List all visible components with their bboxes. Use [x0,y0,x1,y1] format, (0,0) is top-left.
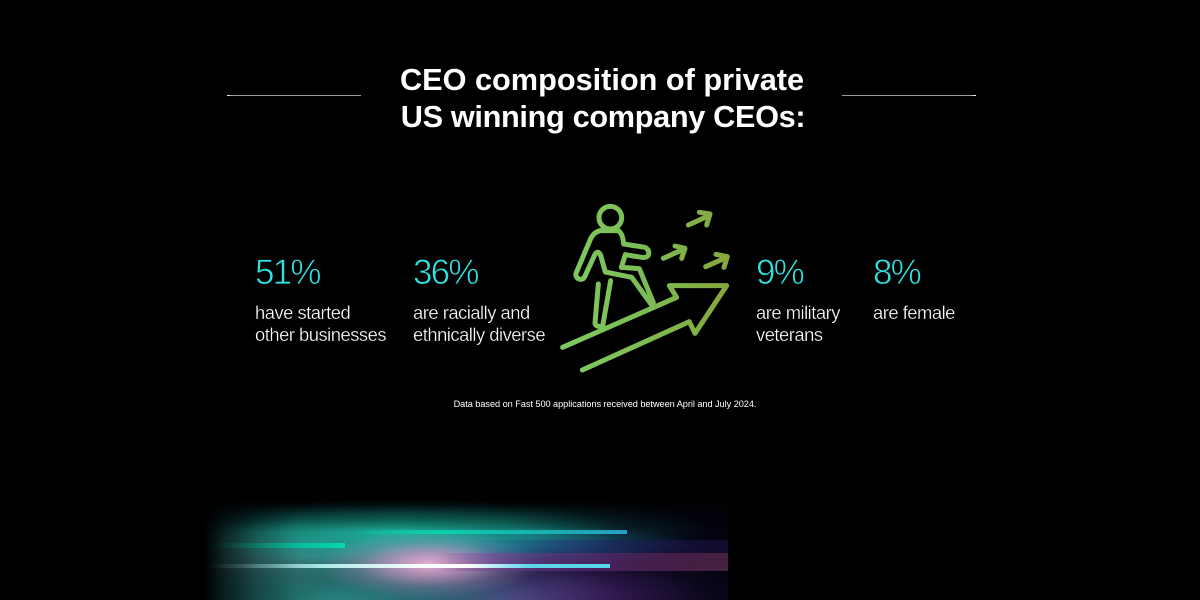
stat: 36% racially and ethnically diverse: are racially and [413,302,530,323]
stat: 51% started other businesses [255,253,386,345]
right title rule [842,95,976,96]
stat: 51% started other businesses: have started [255,302,350,323]
left title rule [227,95,361,96]
stat: 9% military veterans: 9% [756,253,803,292]
edge fade [204,500,728,600]
footnote: Data based on Fast 500 applications received between April and July 2024. [454,399,756,409]
title [400,62,805,134]
stat: 9% military veterans [756,253,840,345]
stat: 8% female [873,253,955,323]
stat: 36% racially and ethnically diverse: 36% [413,253,478,292]
stat: 8% female: are female [873,302,955,323]
stat: 9% military veterans: veterans [756,324,823,345]
bright cyan-white streak [204,564,610,568]
decorative light streak banner [204,500,728,600]
teal streak [354,530,627,534]
stat: 51% started other businesses: 51% [255,253,320,292]
stat: 36% racially and ethnically diverse [413,253,545,345]
stat: 9% military veterans: are military [756,302,840,323]
purple band [204,553,728,571]
title: US winning company CEOs: [401,99,805,134]
stat: 51% started other businesses: other businesses [255,324,386,345]
stat: 8% female: 8% [873,253,920,292]
icon: climbing figure with arrows [560,204,730,372]
stat: 36% racially and ethnically diverse: ethnically diverse [413,324,545,345]
green streak [204,543,345,548]
blue band [204,540,728,553]
title: CEO composition of private [400,62,804,97]
